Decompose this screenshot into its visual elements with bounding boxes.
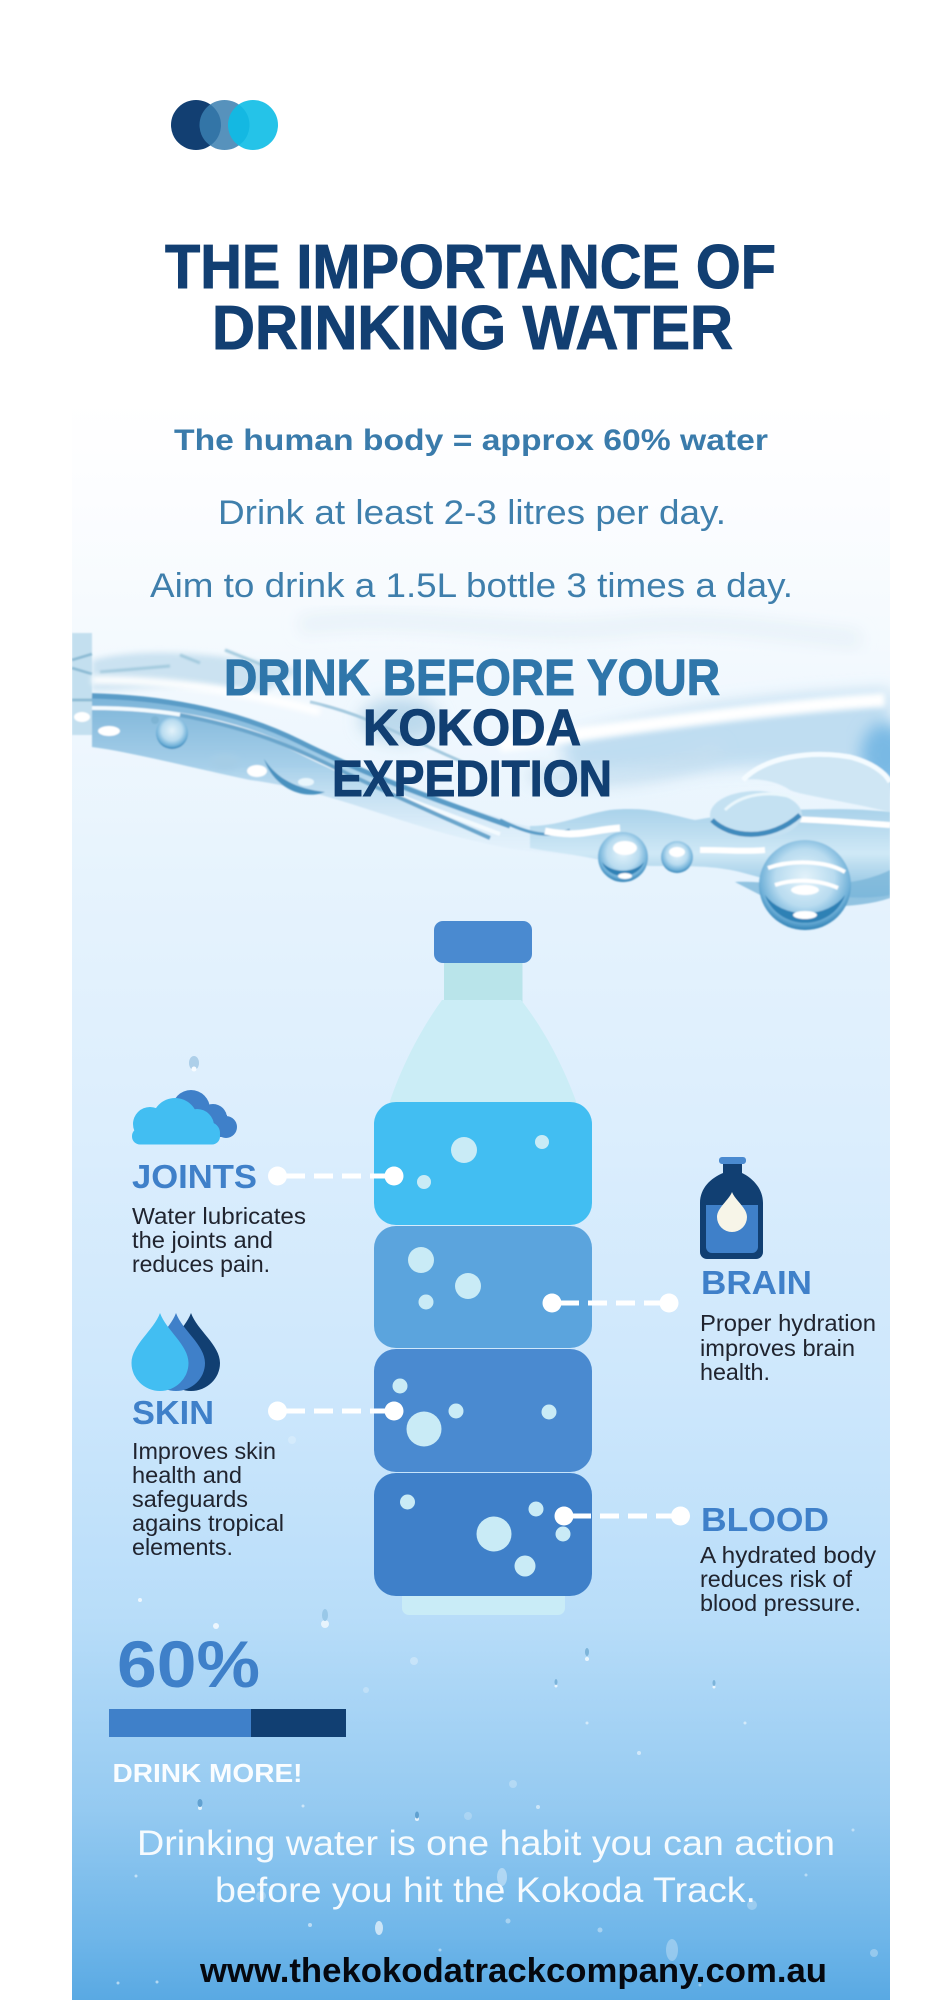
- scattered water droplets: [116, 1056, 878, 1986]
- description: brain: improves brain: [700, 1335, 855, 1361]
- description: skin: Improves skin: [132, 1438, 276, 1464]
- title: DRINKING WATER: [212, 294, 733, 363]
- heading: skin: SKIN: [132, 1394, 214, 1431]
- connector: blood: [554, 1506, 690, 1526]
- icon: water drops: [132, 1313, 220, 1391]
- description: skin: health and: [132, 1462, 242, 1488]
- heading: blood: BLOOD: [701, 1501, 829, 1538]
- description: skin: elements.: [132, 1534, 233, 1560]
- bottle cap: [434, 921, 532, 963]
- heading: drink before your Kokoda expedition: DRINK BEFORE YOUR: [224, 649, 720, 706]
- heading: joints: JOINTS: [132, 1158, 257, 1195]
- description: joints: reduces pain.: [132, 1251, 270, 1277]
- segment 4: [374, 1473, 592, 1596]
- title: [165, 233, 776, 363]
- description: blood: A hydrated body: [700, 1542, 877, 1568]
- block: blood: [700, 1501, 877, 1616]
- segment 2: [374, 1226, 592, 1348]
- advice: daily litres: Drink at least 2-3 litres per day.: [218, 494, 726, 532]
- description: skin: [132, 1438, 284, 1560]
- description: blood: blood pressure.: [700, 1590, 861, 1616]
- closing statement: before you hit the Kokoda Track.: [215, 1871, 756, 1910]
- water wave photo illustration: [72, 621, 909, 930]
- bottle illustration: [374, 921, 592, 1615]
- heading: drink before your Kokoda expedition: KOKODA: [363, 699, 581, 756]
- closing statement: [137, 1824, 835, 1910]
- closing statement: Drinking water is one habit you can action: [137, 1824, 835, 1863]
- icon: water bottle with drop: [700, 1157, 763, 1259]
- connector: skin: [268, 1402, 404, 1420]
- logo: three overlapping circles: [171, 100, 278, 150]
- segment 3: [374, 1349, 592, 1472]
- segment 1: [374, 1102, 592, 1225]
- bottle shoulder: [389, 1000, 577, 1104]
- block: skin: [132, 1394, 284, 1560]
- description: skin: agains tropical: [132, 1510, 284, 1536]
- heading: drink before your Kokoda expedition: EXPEDITION: [332, 750, 612, 807]
- stat: 60%: 60%: [117, 1627, 260, 1701]
- description: brain: [700, 1310, 876, 1385]
- advice: bottle target: Aim to drink a 1.5L bottle 3 times a day.: [150, 567, 793, 605]
- background water panel: [72, 400, 890, 2000]
- description: skin: safeguards: [132, 1486, 248, 1512]
- heading: brain: BRAIN: [701, 1264, 812, 1301]
- title: THE IMPORTANCE OF: [165, 233, 776, 302]
- icon: clouds: [132, 1090, 237, 1144]
- progress bar: 60 percent: [109, 1709, 346, 1737]
- description: brain: Proper hydration: [700, 1310, 876, 1336]
- connector: brain: [542, 1294, 678, 1312]
- description: blood: [700, 1542, 877, 1616]
- website url: www.thekokodatrackcompany.com.au: [199, 1952, 827, 1990]
- block: joints: [132, 1158, 306, 1277]
- description: joints: [132, 1203, 306, 1277]
- description: blood: reduces risk of: [700, 1566, 853, 1592]
- description: brain: health.: [700, 1359, 770, 1385]
- key fact: body water share: The human body = approx 60% water: [174, 424, 768, 457]
- bottle neck: [444, 960, 522, 1002]
- description: joints: Water lubricates: [132, 1203, 306, 1229]
- block: brain: [700, 1264, 876, 1385]
- bottle base: [402, 1585, 565, 1615]
- description: joints: the joints and: [132, 1227, 273, 1253]
- heading: drink before your Kokoda expedition: [224, 649, 720, 807]
- label: drink more: DRINK MORE!: [112, 1758, 302, 1788]
- connector: joints: [268, 1166, 404, 1186]
